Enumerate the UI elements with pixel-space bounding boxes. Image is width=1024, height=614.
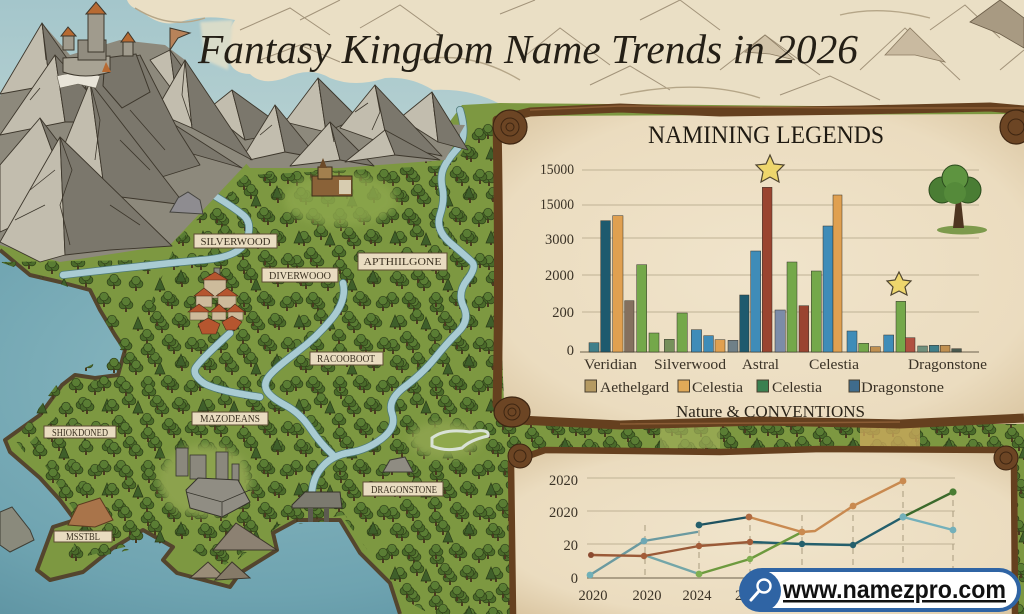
bar chart (540, 162, 987, 373)
x axis labels: 2 (735, 588, 742, 604)
label: Silverwood (194, 234, 277, 248)
icon: lake ring (432, 431, 488, 450)
y axis labels: 3000 (545, 232, 574, 248)
chart heading: NAMINING LEGENDS (648, 122, 884, 149)
icon: stone bridge (292, 492, 342, 522)
data points (587, 478, 957, 578)
panel: line chart (508, 444, 1018, 614)
bars (589, 187, 961, 352)
icon: island ruins (0, 507, 34, 552)
icon: coastal peak (190, 523, 277, 580)
line chart (549, 473, 957, 604)
label: Apthiilgone (358, 253, 447, 270)
x axis labels: Silverwood (654, 357, 727, 373)
eastern range (205, 78, 468, 168)
legend (585, 380, 944, 396)
website text: www.namezpro.com (782, 576, 1006, 604)
label: Msstbl: MSSTBL (66, 532, 100, 543)
label: Racooboot: RACOOBOOT (317, 354, 375, 365)
label: Shiokdoned: SHIOKDONED (52, 428, 108, 439)
rivers (63, 110, 474, 492)
label: Msstbl (54, 531, 112, 543)
label: Diverwooo: DIVERWOOO (269, 271, 331, 282)
icon: oak tree (929, 165, 987, 234)
label: Diverwooo (262, 268, 338, 282)
y axis labels (540, 162, 574, 359)
label: Mazodeans (192, 412, 268, 425)
y axis labels: 20 (564, 538, 578, 554)
x axis labels: Dragonstone (908, 357, 987, 373)
label: Apthiilgone: APTHIILGONE (364, 257, 442, 268)
y axis labels: 2020 (549, 473, 578, 489)
legend: Celestia (772, 380, 822, 396)
icon: hill town (312, 158, 352, 196)
icon: magnifying glass (739, 570, 781, 612)
x axis labels (578, 588, 742, 604)
y axis labels: 2000 (545, 268, 574, 284)
legend: Dragonstone (861, 380, 944, 396)
icon: large star (756, 155, 784, 182)
y axis labels: 200 (552, 305, 574, 321)
parchment clouds with sketched mountains (127, 0, 1024, 112)
legend: Celestia (692, 380, 743, 396)
y axis labels: 0 (571, 571, 578, 587)
x axis labels: 2020 (632, 588, 662, 604)
x axis labels: 2020 (578, 588, 608, 604)
icon: dark fortress (176, 448, 250, 517)
label: Silverwood: SILVERWOOD (200, 237, 270, 248)
icon: small star (887, 272, 911, 295)
legend: Aethelgard (600, 380, 670, 396)
panel frame (508, 444, 1018, 614)
icon: mountain castle (57, 2, 190, 108)
series lines (590, 481, 953, 575)
mountain range (0, 23, 468, 262)
label: Dragonstone: DRAGONSTONE (371, 485, 437, 496)
map labels (44, 234, 447, 543)
y axis labels: 15000 (540, 162, 574, 178)
website badge (739, 570, 1019, 612)
label: Dragonstone (363, 482, 443, 496)
icon: grey village (170, 192, 203, 214)
panel: naming legends bar chart (493, 106, 1024, 427)
y axis labels: 0 (567, 343, 574, 359)
y axis labels: 15000 (540, 197, 574, 213)
x axis labels: Celestia (809, 357, 860, 373)
icon: red roofed town (188, 268, 245, 334)
icon: orange village (68, 498, 113, 527)
label: Mazodeans: MAZODEANS (200, 414, 260, 425)
icon: river village (383, 457, 413, 472)
western massif (0, 23, 252, 262)
panel frame (493, 106, 1024, 427)
y axis labels (549, 473, 578, 587)
x axis labels: 2024 (682, 588, 712, 604)
y axis labels: 2020 (549, 505, 578, 521)
x axis labels (584, 357, 987, 373)
title: Fantasy Kingdom Name Trends in 2026 (197, 26, 859, 72)
x axis labels: Veridian (584, 357, 638, 373)
chart footer: Nature & CONVENTIONS (676, 402, 865, 421)
x axis labels: Astral (742, 357, 779, 373)
